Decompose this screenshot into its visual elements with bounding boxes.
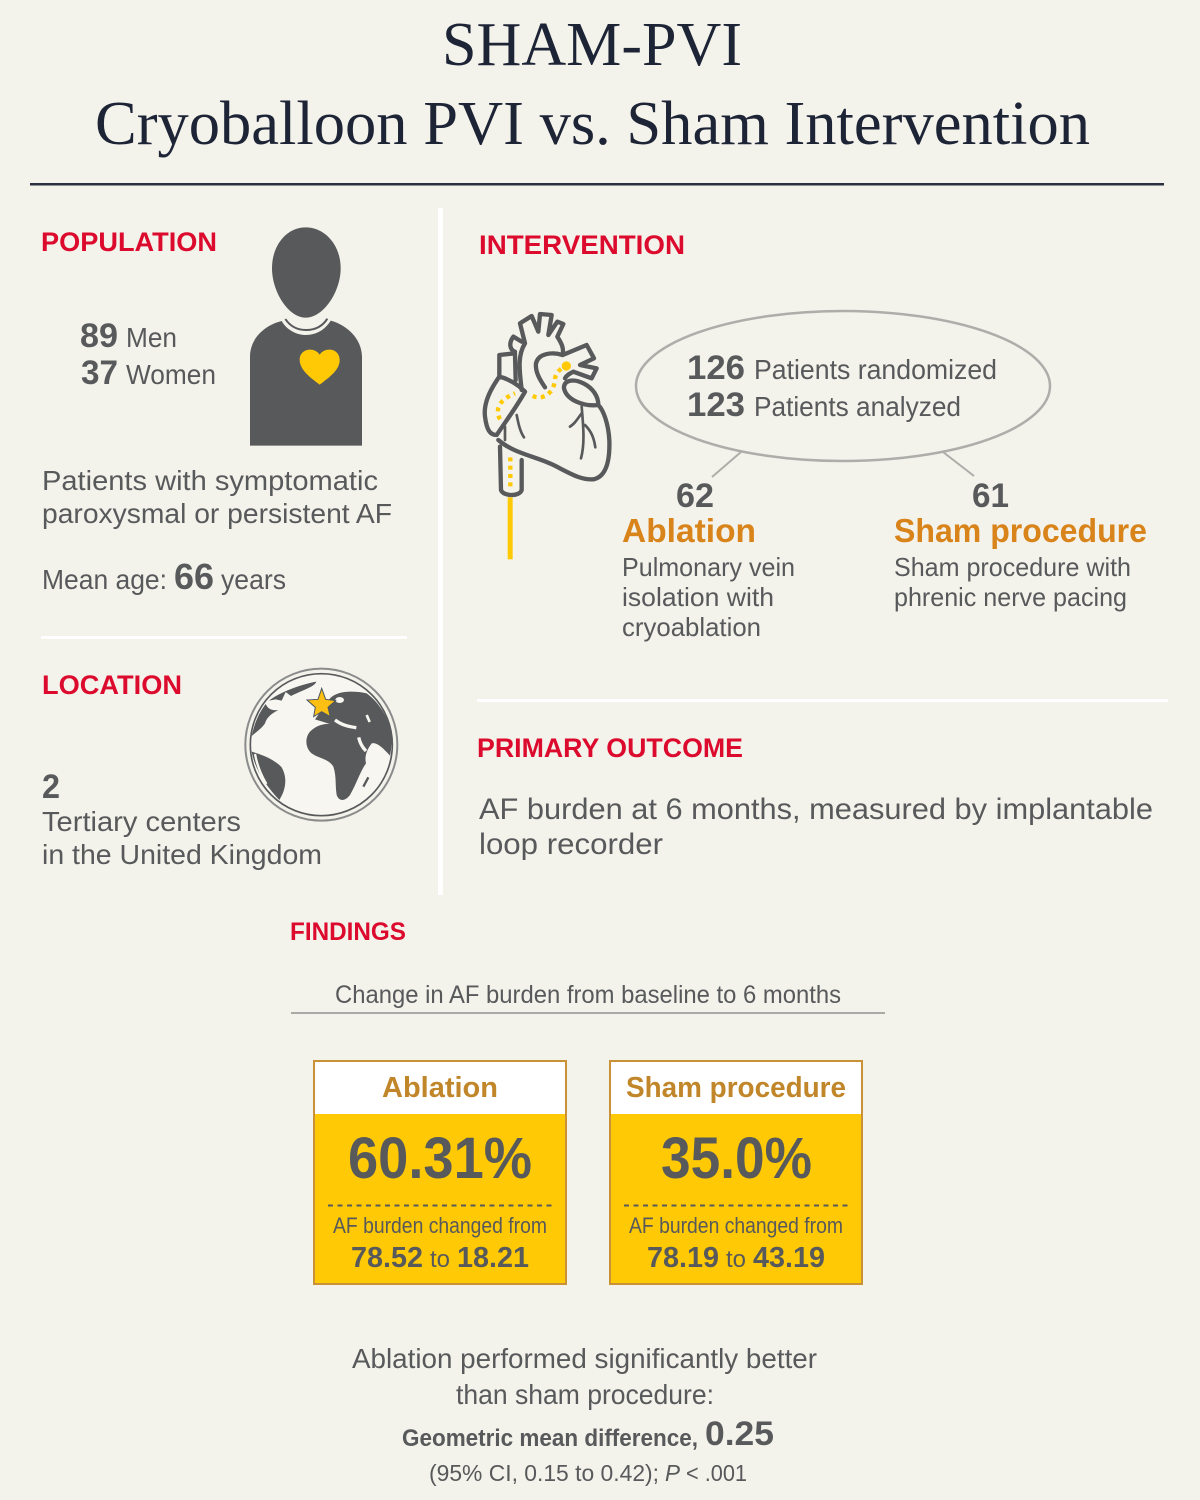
card: ablation result: Ablation [382, 1072, 498, 1104]
conclusion text: Ablation performed significantly better [352, 1343, 817, 1374]
card: sham result: Sham procedure [626, 1072, 846, 1104]
card: ablation result: AF burden changed from [333, 1213, 547, 1238]
ellipse: patients randomized and analyzed: Patients randomized [754, 354, 997, 385]
men and women counts: Men [126, 322, 177, 353]
conclusion text [352, 1343, 817, 1486]
population description: Patients with symptomatic [42, 465, 378, 496]
ablation arm: Pulmonary vein [622, 552, 795, 582]
card: sham result: 78.19 [647, 1242, 719, 1274]
card: sham result: AF burden changed from [629, 1213, 843, 1238]
sham arm: Sham procedure [894, 512, 1147, 549]
ablation arm [622, 477, 795, 642]
connector: sham [943, 452, 974, 476]
panel: location [42, 669, 397, 870]
outcome text [479, 793, 1153, 861]
mean age: Mean age: [42, 564, 167, 595]
card: sham result: 35.0% [661, 1126, 812, 1191]
sham arm: Sham procedure with [894, 552, 1131, 582]
sham arm [894, 477, 1147, 612]
men and women counts: 37 [81, 354, 118, 392]
mean age: years [221, 564, 286, 595]
heading: population: POPULATION [41, 227, 217, 257]
ablation arm: Ablation [622, 512, 756, 549]
icon: person with heart [250, 227, 362, 446]
card: sham result: 43.19 [753, 1242, 825, 1274]
conclusion text: than sham procedure: [456, 1379, 714, 1410]
card: ablation result: 78.52 [351, 1242, 423, 1274]
ablation arm: cryoablation [622, 612, 761, 642]
card: ablation result: 18.21 [457, 1242, 529, 1274]
chart subtitle: Change in AF burden from baseline to 6 months [335, 981, 841, 1009]
outcome text: AF burden at 6 months, measured by implantable [479, 793, 1153, 826]
panel: population [41, 227, 392, 597]
card: sham result [610, 1061, 862, 1284]
ellipse: patients randomized and analyzed: 123 [687, 386, 745, 424]
title [95, 11, 1090, 158]
heading: primary outcome: PRIMARY OUTCOME [477, 733, 743, 763]
heading: intervention: INTERVENTION [479, 230, 685, 260]
title: SHAM-PVI [442, 11, 742, 79]
card: ablation result [314, 1061, 566, 1284]
population description: paroxysmal or persistent AF [42, 498, 392, 529]
location text: in the United Kingdom [42, 839, 322, 870]
men and women counts: 89 [80, 317, 118, 355]
heading: location: LOCATION [42, 670, 182, 700]
conclusion text: Geometric mean difference, [402, 1425, 698, 1452]
sham arm: phrenic nerve pacing [894, 582, 1127, 612]
ablation arm: isolation with [622, 582, 774, 612]
location text: 2 [42, 768, 60, 806]
mean age [42, 556, 286, 597]
location text [42, 768, 322, 870]
icon: heart with catheter [485, 314, 609, 559]
card: ablation result: to [430, 1246, 450, 1273]
population description [42, 465, 392, 529]
men and women counts [80, 317, 216, 392]
card: sham result: to [726, 1246, 746, 1273]
icon: globe with star [245, 669, 397, 821]
connector: ablation [712, 452, 741, 477]
card: ablation result: 60.31% [348, 1126, 532, 1191]
conclusion text: (95% CI, 0.15 to 0.42); [429, 1460, 659, 1486]
conclusion text: < .001 [686, 1460, 747, 1486]
outcome text: loop recorder [479, 828, 663, 861]
heading: findings: FINDINGS [290, 918, 406, 946]
ellipse: patients randomized and analyzed [636, 311, 1050, 461]
conclusion text: P [665, 1460, 681, 1486]
sham arm: 61 [972, 477, 1009, 515]
mean age: 66 [174, 556, 214, 597]
ellipse: patients randomized and analyzed: 126 [687, 349, 745, 387]
panel: intervention [479, 230, 1147, 642]
panel: findings [290, 918, 885, 1486]
men and women counts: Women [126, 359, 216, 390]
conclusion text: 0.25 [705, 1415, 774, 1453]
ellipse: patients randomized and analyzed: Patients analyzed [754, 391, 961, 422]
location text: Tertiary centers [42, 806, 241, 837]
panel: primary outcome [477, 733, 1153, 861]
title: Cryoballoon PVI vs. Sham Intervention [95, 90, 1090, 158]
ablation arm: 62 [676, 477, 714, 515]
